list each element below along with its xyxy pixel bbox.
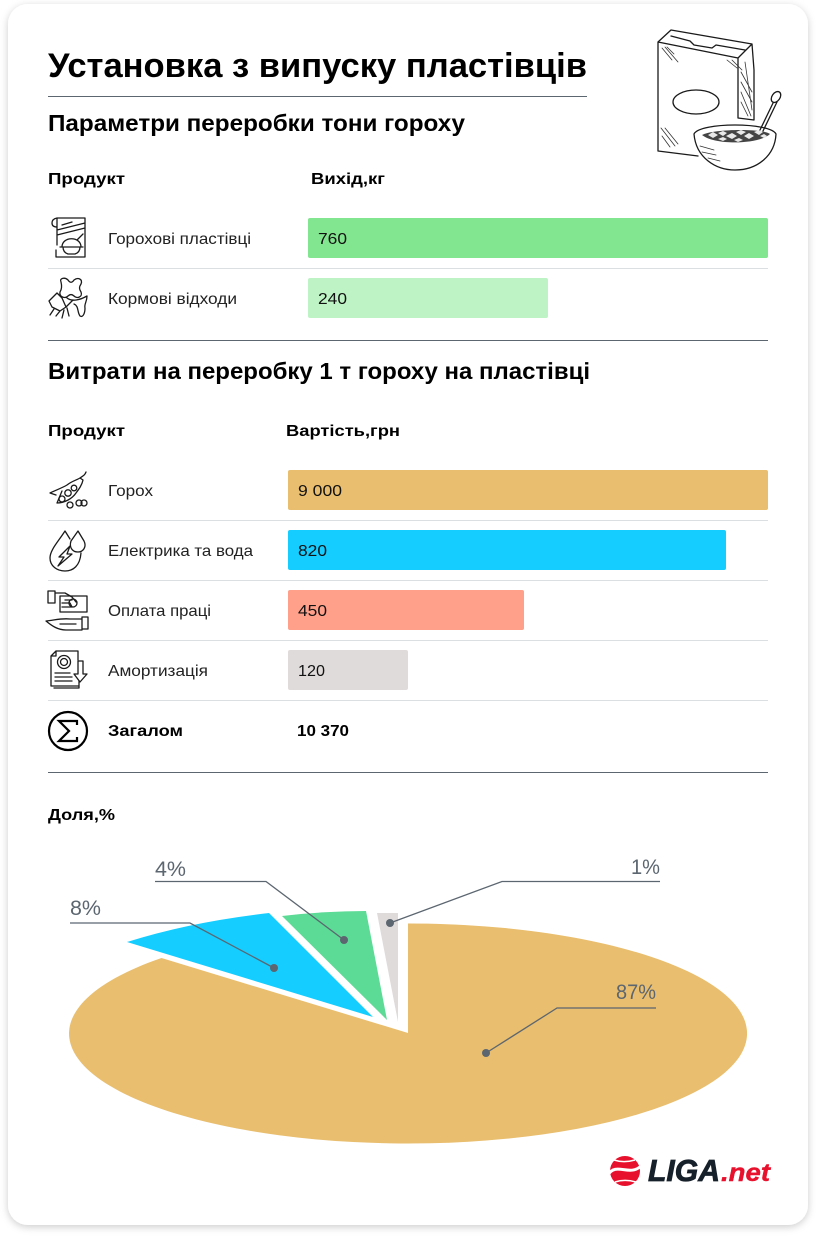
bar: pea flakes 760: 760 xyxy=(318,231,347,248)
table header: product: Продукт xyxy=(48,171,125,188)
heading: share: Доля,% xyxy=(48,807,115,824)
row label: electricity and water: Електрика та вода xyxy=(108,543,253,560)
bar: electricity and water 820: 820 xyxy=(298,543,327,560)
icon: pea pod xyxy=(50,472,87,508)
row label: peas: Горох xyxy=(108,483,153,500)
row label: pea flakes: Горохові пластівці xyxy=(108,231,251,248)
bar: pea flakes 760 xyxy=(308,218,768,258)
row label: feed waste: Кормові відходи xyxy=(108,291,237,308)
callout: 87% xyxy=(482,981,656,1057)
bar: feed waste 240: 240 xyxy=(318,291,347,308)
table header: product: Продукт xyxy=(48,423,125,440)
callout: 4%: 4% xyxy=(155,858,186,881)
total value: 10 370 xyxy=(297,723,349,740)
callout: 1%: 1% xyxy=(631,856,660,879)
callout: 8% xyxy=(70,897,278,972)
bar: peas 9 000 xyxy=(288,470,768,510)
callout: 1% xyxy=(386,856,660,927)
table header: cost: Вартість,грн xyxy=(286,423,400,440)
bar: feed waste 240 xyxy=(308,278,548,318)
row label: total: Загалом xyxy=(108,723,183,740)
slice: amortization 1% xyxy=(377,913,398,1022)
row label: wages: Оплата праці xyxy=(108,603,211,620)
logo: LIGA.net: LIGA xyxy=(648,1153,720,1188)
bar: peas 9 000: 9 000 xyxy=(298,483,342,500)
heading: processing parameters: Параметри переробки тони гороху xyxy=(48,110,465,136)
icon: feed waste xyxy=(49,278,87,318)
illustration: cereal box and bowl xyxy=(658,30,783,170)
logo: LIGA.net: .net xyxy=(721,1159,772,1187)
slice: electricity and water 8% xyxy=(127,913,373,1017)
slice: peas 87% xyxy=(69,924,747,1144)
callout: 4% xyxy=(155,858,348,944)
icon: wages xyxy=(46,591,88,630)
table header: output: Вихід,кг xyxy=(311,171,385,188)
bar: amortization 120 xyxy=(288,650,408,690)
icon: sum xyxy=(49,712,87,750)
bar: amortization 120: 120 xyxy=(298,663,325,680)
slice: wages 4% xyxy=(282,911,387,1020)
icon: electricity and water xyxy=(50,531,85,571)
bar: wages 450 xyxy=(288,590,524,630)
callout: 8%: 8% xyxy=(70,897,101,920)
callout: 87%: 87% xyxy=(616,981,656,1004)
icon: flakes package xyxy=(52,218,85,257)
bar: wages 450: 450 xyxy=(298,603,327,620)
row label: amortization: Амортизація xyxy=(108,663,208,680)
icon: amortization xyxy=(51,651,87,688)
logo: LIGA.net xyxy=(608,1153,772,1188)
pie chart xyxy=(69,856,747,1144)
title: Установка з випуску пластівців xyxy=(48,47,587,85)
heading: processing costs: Витрати на переробку 1 т гороху на пластівці xyxy=(48,358,590,384)
bar: electricity and water 820 xyxy=(288,530,726,570)
